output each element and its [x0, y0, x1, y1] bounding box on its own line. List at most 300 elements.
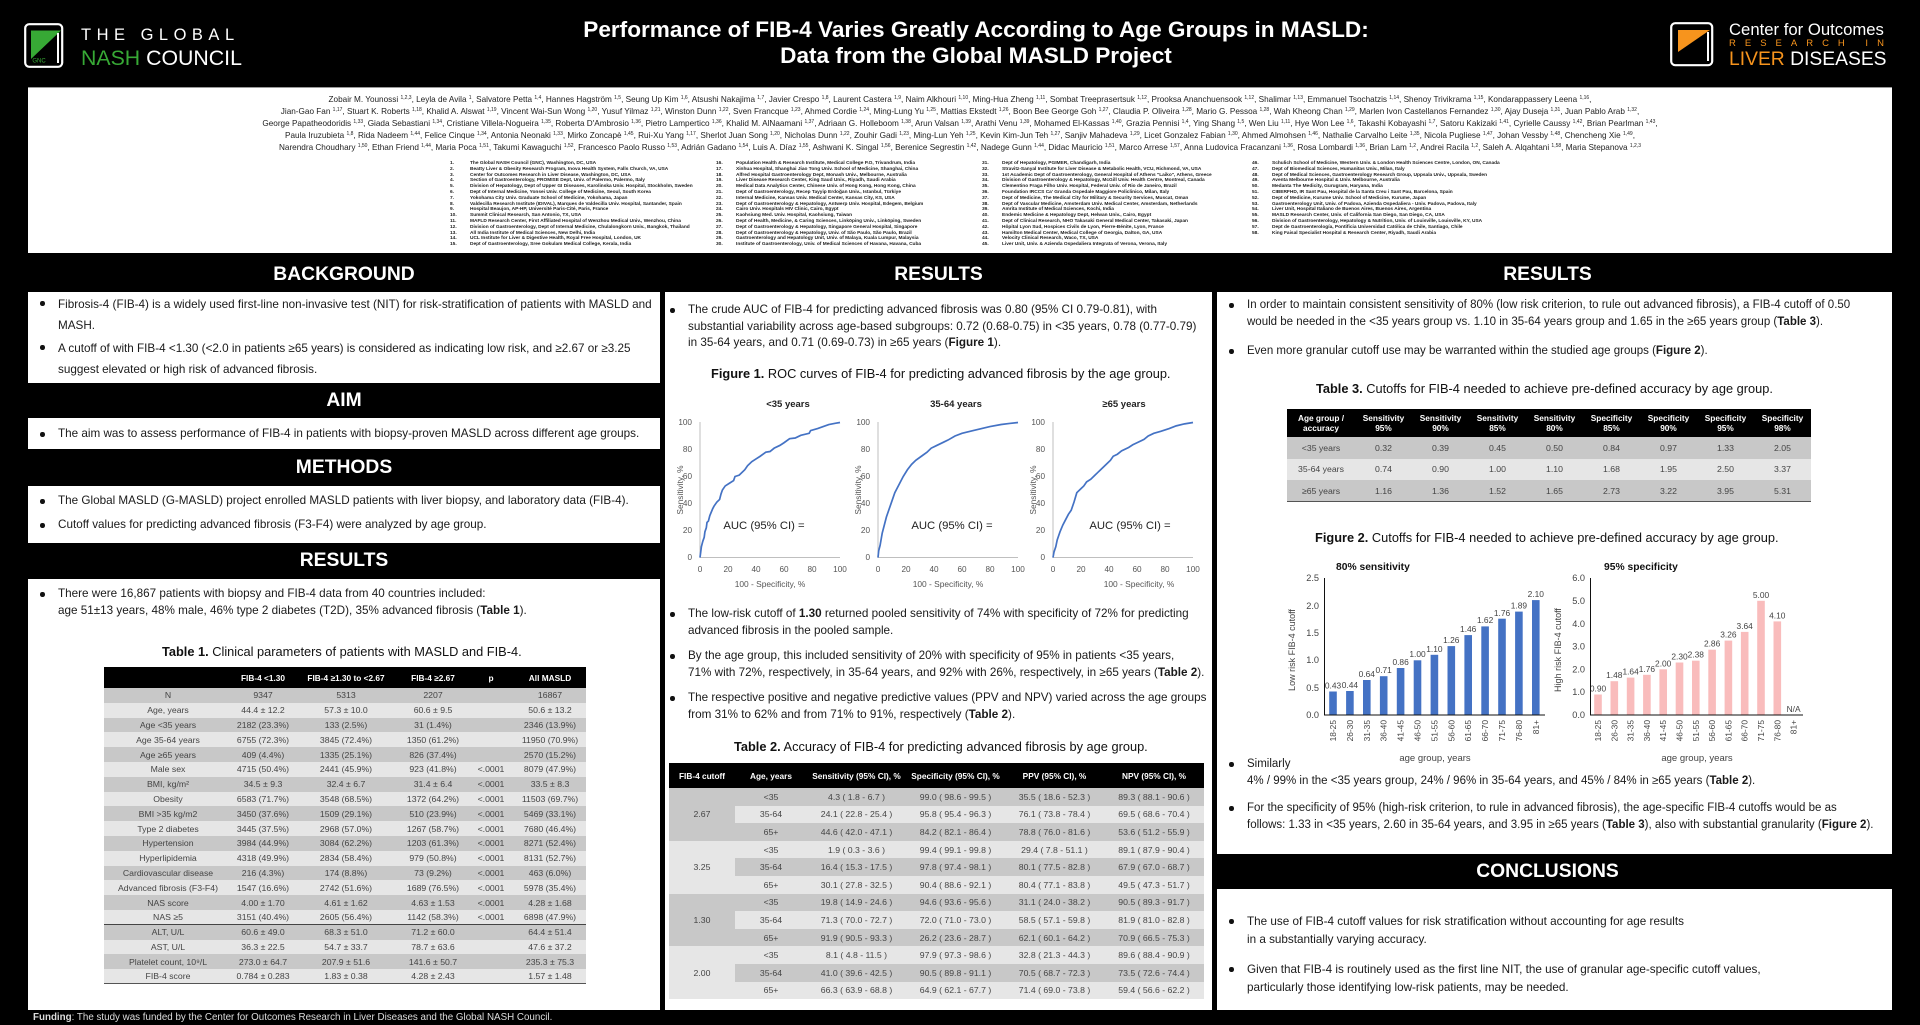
table 2: 67.9 ( 67.0 - 68.7 )	[1118, 862, 1190, 872]
table 2: 73.5 ( 72.6 - 74.4 )	[1118, 968, 1190, 978]
table 1: 5469 (33.1%)	[524, 809, 576, 819]
table 1: Type 2 diabetes	[137, 824, 199, 834]
table 1: 8271 (52.4%)	[524, 838, 576, 848]
chart: 95% specificity high risk cutoff: 41-45	[1658, 720, 1668, 741]
chart: 80% sensitivity low risk cutoff: 1.10	[1426, 644, 1443, 654]
panel: authors and affiliations: 28.	[716, 231, 723, 236]
heading: conclusions: CONCLUSIONS	[1476, 861, 1619, 882]
table 1: 3450 (37.6%)	[237, 809, 289, 819]
table 1: 32.4 ± 6.7	[327, 779, 365, 789]
table 2: 35-64	[760, 915, 782, 925]
panel: authors and affiliations: 32.	[982, 167, 989, 172]
affiliations column 1: Division of Hepatology, Dept of Upper GI Diseases, Karolinska Univ. Hospital, Stockholm, Sweden	[470, 184, 693, 189]
table 1: Obesity	[153, 794, 183, 804]
table 1: 68.3 ± 51.0	[324, 927, 368, 937]
chart: ROC 35-64 years: 20	[861, 526, 870, 535]
affiliations column 2: Kaohsiung Med. Univ. Hospital, Kaohsiung, Taiwan	[736, 213, 852, 218]
table 1: <.0001	[478, 853, 504, 863]
header band	[0, 0, 1920, 87]
chart: 95% specificity high risk cutoff: 2.0	[1572, 664, 1585, 674]
table 1: FIB-4 score	[146, 971, 190, 981]
panel: authors and affiliations: 13.	[450, 231, 457, 236]
table 1: <.0001	[478, 868, 504, 878]
panel: authors and affiliations: 56.	[1252, 219, 1259, 224]
table 2: 30.1 ( 27.8 - 32.5 )	[821, 880, 892, 890]
logo text: Liver Diseases: LIVER DISEASES	[1729, 49, 1887, 70]
affiliations column 3: Division of Gastroenterology & Hepatology, McGill Univ. Health Centre, Montreal, Canada	[1002, 178, 1205, 183]
panel: authors and affiliations: 29.	[716, 236, 723, 241]
affiliations column 1: MAFLD Research Center, First Affiliated Hospital of Wenzhou Medical Univ., Wenzhou, China	[470, 219, 681, 224]
table 2: <35	[764, 792, 778, 802]
table 3: 85%	[1603, 423, 1620, 433]
bullet: cutoffs: suggest elevated or high risk of advanced fibrosis.	[58, 362, 317, 376]
bullet: specificity of 95%: For the specificity of 95% (high-risk criterion, to rule in advanced fibrosis), the age-specific FIB-4 cutoffs would be as	[1247, 802, 1837, 814]
panel: authors and affiliations: 17.	[716, 167, 723, 172]
affiliations column 1: UCL Institute for Liver & Digestive Health, Royal Free Hospital, London, UK	[470, 236, 641, 241]
icon: GNC mark: GNC	[32, 58, 46, 64]
chart: 80% sensitivity low risk cutoff: age group, years	[1399, 753, 1471, 764]
panel: authors and affiliations: 2.	[450, 167, 454, 172]
bullet: by age group: By the age group, this included sensitivity of 20% with specificity of 95% in patients <35 years,	[688, 649, 1174, 662]
table 2: 97.8 ( 97.4 - 98.1 )	[920, 862, 991, 872]
table 2: 91.9 ( 90.5 - 93.3 )	[821, 933, 892, 943]
table 1: 71.2 ± 60.0	[411, 927, 455, 937]
table 1: Cardiovascular disease	[123, 868, 213, 878]
table 1: Age ≥65 years	[140, 750, 196, 760]
affiliations column 4: Liver Unit, Hospital Italiano de Buenos Aires, Buenos Aires, Argentina	[1272, 207, 1431, 212]
table 2: 76.1 ( 73.8 - 78.4 )	[1019, 809, 1090, 819]
affiliations column 4: Division of Gastroenterology, Hepatology & Nutrition, Univ. of Louisville, Louisville, KY, USA	[1272, 219, 1482, 224]
table 2: 24.1 ( 22.8 - 25.4 )	[821, 809, 892, 819]
affiliations column 3: Hôpital Lyon Sud, Hospices Civils de Lyon, Pierre-Bénite, Lyon, France	[1002, 225, 1164, 230]
table 2: 31.1 ( 24.0 - 38.2 )	[1019, 897, 1090, 907]
table 2: 69.5 ( 68.6 - 70.4 )	[1118, 809, 1190, 819]
chart: 80% sensitivity low risk cutoff: 51-55	[1429, 720, 1439, 741]
affiliations column 2: Xinhua Hospital, Shanghai Jiao Tong Univ. School of Medicine, Shanghai, China	[736, 167, 918, 172]
chart: ROC under 35 years: 80	[683, 445, 692, 454]
bullet: cutoffs: A cutoff of with FIB-4 <1.30 (<2.0 in patients ≥65 years) is considered as indicating low risk, and ≥2.67 or ≥3.25	[58, 342, 631, 355]
author list	[262, 95, 1658, 152]
table 1: NAS ≥5	[153, 912, 183, 922]
table 3: 0.84	[1603, 443, 1620, 453]
table 1: 3845 (72.4%)	[320, 735, 372, 745]
chart: ROC under 35 years: AUC (95% CI) =	[723, 520, 805, 532]
chart: 80% sensitivity low risk cutoff: 0.86	[1392, 657, 1409, 667]
table 3	[1287, 409, 1811, 502]
table 1: <.0001	[478, 883, 504, 893]
table 1: 216 (4.3%)	[242, 868, 284, 878]
panel: authors and affiliations: 19.	[716, 178, 723, 183]
affiliations column 2: Institute of Gastroenterology, Univ. of Medical Sciences of Havana, Havana, Cuba	[736, 242, 921, 247]
bullet: cohort: age 51±13 years, 48% male, 46% type 2 diabetes (T2D), 35% advanced fibrosis (Table 1).	[58, 604, 527, 617]
table 2: 19.8 ( 14.9 - 24.6 )	[821, 897, 892, 907]
table 1: 3084 (62.2%)	[320, 838, 372, 848]
chart: ROC 35-64 years: 40	[861, 499, 870, 508]
table 2: 3.25	[694, 862, 710, 872]
table 2: 41.0 ( 39.6 - 42.5 )	[821, 968, 892, 978]
table 1: 409 (4.4%)	[242, 750, 284, 760]
panel: authors and affiliations: 53.	[1252, 202, 1259, 207]
author list: Narendra Choudhary 1,50, Ethan Friend 1,44, Maria Poca 1,51, Takumi Kawaguchi 1,52, Francesco Paolo Russo 1,53, Adrián Gadano 1,54, Luis A. Díaz 1,55, Ashwani K. Singal 1,56, Berenice Segrestin 1,42, Nadege Gunn 1,44, Didac Mauricio 1,51, Marco Arrese 1,57, Anna Ludovica Fracanzani 1,36, Rosa Lombardi 1,36, Brian Lam 1,2, Andrei Racila 1,2, Saleh A. Alqahtani 1,58, Maria Stepanova 1,2,3	[279, 143, 1641, 152]
panel: authors and affiliations: 38.	[982, 202, 989, 207]
table 3: 90%	[1432, 423, 1449, 433]
chart: 80% sensitivity low risk cutoff: 41-45	[1396, 720, 1406, 741]
table 1: 16867	[538, 690, 562, 700]
table 2: 35-64	[760, 862, 782, 872]
panel: authors and affiliations: 25.	[716, 213, 723, 218]
table 1: 6583 (71.7%)	[237, 794, 289, 804]
table 1: 3151 (40.4%)	[237, 912, 289, 922]
heading: background: BACKGROUND	[273, 264, 415, 285]
table 1: <.0001	[478, 824, 504, 834]
chart: 95% specificity high risk cutoff: 5.0	[1572, 596, 1585, 606]
affiliations column 1: Hospital Beaujon, AP-HP, Université Paris-Cité, Paris, France	[470, 207, 608, 212]
panel: authors and affiliations: 11.	[450, 219, 456, 224]
chart: ROC 65 years and over: 60	[1132, 565, 1142, 574]
panel: authors and affiliations: 24.	[716, 207, 723, 212]
chart: 80% sensitivity low risk cutoff: 0.44	[1342, 680, 1358, 690]
table 1: 141.6 ± 50.7	[409, 957, 457, 967]
table 1: 1689 (76.5%)	[407, 883, 459, 893]
affiliations column 1: Division of Gastroenterology, Dept of Internal Medicine, Chulalongkorn Univ., Bangkok, Thailand	[470, 225, 690, 230]
chart: ROC under 35 years: 20	[723, 565, 733, 574]
table 2: 64.9 ( 62.1 - 67.7 )	[920, 985, 991, 995]
affiliations column 3: Dept of Clinical Research, NHO Takasaki General Medical Center, Takasaki, Japan	[1002, 219, 1188, 224]
table 2: 4.3 ( 1.8 - 6.7 )	[828, 792, 885, 802]
chart: ROC under 35 years: <35 years	[766, 399, 810, 410]
table 1: 4.28 ± 2.43	[411, 971, 455, 981]
affiliations column 1: The Global NASH Council (GNC), Washington, DC, USA	[470, 161, 596, 166]
chart: 95% specificity high risk cutoff: 0.0	[1572, 710, 1585, 720]
table 1: 4.61 ± 1.62	[324, 898, 368, 908]
table 1: 0.784 ± 0.283	[236, 971, 290, 981]
table 3: Specificity	[1762, 413, 1803, 423]
table 3: 95%	[1375, 423, 1392, 433]
table 1: 463 (6.0%)	[529, 868, 571, 878]
panel: results column 1	[28, 543, 660, 1010]
table 1: <.0001	[478, 898, 504, 908]
bullet: consistent sensitivity: In order to maintain consistent sensitivity of 80% (low risk criterion, to rule out advanced fibrosis), a FIB-4 cutoff of 0.50	[1247, 299, 1850, 311]
chart: 95% specificity high risk cutoff: 95% specificity	[1604, 562, 1678, 573]
chart: 95% specificity high risk cutoff: 18-25	[1593, 720, 1603, 741]
panel: authors and affiliations: 12.	[450, 225, 457, 230]
panel: authors and affiliations: 37.	[982, 196, 989, 201]
chart: 80% sensitivity low risk cutoff: 36-40	[1379, 720, 1389, 741]
table 1: 1350 (61.2%)	[407, 735, 459, 745]
affiliations column 4: Dept of Medical Sciences, Gastroenterology Research Group, Uppsala Univ., Uppsala, Sweden	[1272, 173, 1487, 178]
chart: ROC under 35 years: 60	[779, 565, 789, 574]
chart: 80% sensitivity low risk cutoff: 1.5	[1306, 628, 1319, 638]
chart: ROC under 35 years: 60	[683, 472, 692, 481]
panel: authors and affiliations: 8.	[450, 202, 454, 207]
table 2: 16.4 ( 15.3 - 17.5 )	[821, 862, 892, 872]
chart: 95% specificity high risk cutoff: 71-75	[1756, 720, 1766, 741]
panel: authors and affiliations: 1.	[450, 161, 454, 166]
heading: methods: METHODS	[296, 457, 392, 478]
table 3: accuracy	[1303, 423, 1339, 433]
chart: ROC 65 years and over: 80	[1160, 565, 1170, 574]
chart: ROC 65 years and over: 0	[1051, 565, 1056, 574]
table 1: 8079 (47.9%)	[524, 764, 576, 774]
affiliations column 1	[450, 160, 693, 247]
bullet: crude AUC: The crude AUC of FIB-4 for predicting advanced fibrosis was 0.80 (95% CI 0.79-0.81), with	[688, 303, 1157, 316]
affiliations column 3: Dept of Hepatology, PGIMER, Chandigarh, India	[1002, 161, 1110, 166]
table 3: 1.36	[1432, 486, 1449, 496]
panel: authors and affiliations: 18.	[716, 173, 723, 178]
affiliations column 4: Schulich School of Medicine, Western Univ. & London Health Sciences Centre, London, ON, Canada	[1272, 161, 1500, 166]
bullet: similarly	[1247, 756, 1755, 789]
table 2: 65+	[764, 880, 778, 890]
panel: authors and affiliations: 30.	[716, 242, 723, 247]
chart: 95% specificity high risk cutoff: 4.0	[1572, 619, 1585, 629]
chart: 95% specificity high risk cutoff: 3.0	[1572, 642, 1585, 652]
table 1: 57.3 ± 10.0	[324, 705, 368, 715]
chart: 80% sensitivity low risk cutoff: 0.71	[1376, 665, 1392, 675]
logo text: Research in: RESEARCH IN	[1729, 38, 1893, 49]
panel: authors and affiliations: 52.	[1252, 196, 1259, 201]
chart: ROC 35-64 years: 35-64 years	[930, 399, 982, 410]
table 3: 3.95	[1717, 486, 1734, 496]
panel: authors and affiliations: 6.	[450, 190, 454, 195]
panel: authors and affiliations: 5.	[450, 184, 454, 189]
affiliations column 2: Population Health & Research Institute, Medical College P.O, Trivandrum, India	[736, 161, 915, 166]
table 2: 71.3 ( 70.0 - 72.7 )	[821, 915, 892, 925]
table 2: 81.9 ( 81.0 - 82.8 )	[1118, 915, 1190, 925]
panel: authors and affiliations: 20.	[716, 184, 723, 189]
affiliations column 3: Liver Unit, Univ. & Azienda Ospedaliera Integrata of Verona, Verona, Italy	[1002, 242, 1167, 247]
chart: 95% specificity high risk cutoff: 2.30	[1671, 652, 1688, 662]
table 1: <.0001	[478, 764, 504, 774]
affiliations column 3: Endemic Medicine & Hepatology Dept, Helwan Univ., Cairo, Egypt	[1002, 213, 1151, 218]
logo text: Center for Outcomes: Center for Outcomes	[1729, 20, 1884, 39]
table 3: 80%	[1546, 423, 1563, 433]
chart: ROC 65 years and over: 100	[1186, 565, 1200, 574]
chart: 80% sensitivity low risk cutoff: 2.10	[1528, 589, 1544, 599]
table 1: Age 35-64 years	[136, 735, 200, 745]
chart: 80% sensitivity low risk cutoff: 46-50	[1412, 720, 1422, 741]
table 1	[104, 667, 586, 984]
author list: Zobair M. Younossi 1,2,3, Leyla de Avila 1, Salvatore Petta 1,4, Hannes Hagström 1,5, Seung Up Kim 1,6, Atsushi Nakajima 1,7, Javier Crespo 1,8, Laurent Castera 1,9, Naim Alkhouri 1,10, Ming-Hua Zheng 1,11, Sombat Treeprasertsuk 1,12, Prooksa Ananchuensook 1,12, Shalimar 1,13, Emmanuel Tsochatzis 1,14, Shenoy Trivikrama 1,15, Kondarappassery Leena 1,16,	[329, 95, 1591, 104]
heading: conclusions	[1217, 854, 1892, 889]
table 1: 4318 (49.9%)	[237, 853, 289, 863]
table 3: 0.74	[1375, 464, 1392, 474]
table 1 caption: Table 1. Clinical parameters of patients with MASLD and FIB-4.	[162, 644, 522, 659]
heading: results: RESULTS	[1503, 264, 1592, 285]
table 2: 26.2 ( 23.6 - 28.7 )	[920, 933, 991, 943]
table 2: <35	[764, 897, 778, 907]
panel: aim	[28, 383, 660, 449]
affiliations column 4: Aventa Melbourne Hospital & Univ. Melbourne, Australia	[1272, 178, 1400, 183]
panel: authors and affiliations: 27.	[716, 225, 723, 230]
chart: 95% specificity high risk cutoff: High risk FIB-4 cutoff	[1553, 608, 1563, 692]
table 1: 44.4 ± 12.2	[241, 705, 285, 715]
table 1: 1.83 ± 0.38	[324, 971, 368, 981]
table 1: 54.7 ± 33.7	[324, 942, 368, 952]
chart: ROC 35-64 years: 0	[876, 565, 881, 574]
chart: 80% sensitivity low risk cutoff: 1.46	[1460, 624, 1477, 634]
affiliations column 3: Velocity Clinical Research, Waco, TX, USA	[1002, 236, 1098, 241]
chart: ROC 35-64 years: 0	[865, 553, 870, 562]
affiliations column 1: Dept of Internal Medicine, Yonsei Univ. College of Medicine, Seoul, South Korea	[470, 190, 651, 195]
table 3: 1.33	[1717, 443, 1734, 453]
table 1: 1547 (16.6%)	[237, 883, 289, 893]
table 1: 7680 (46.4%)	[524, 824, 576, 834]
table 2: 2.67	[694, 809, 710, 819]
bullet: crude AUC: substantial variability across age-based subgroups: 0.72 (0.68-0.75) in <35 years, 0.78 (0.77-0.79)	[688, 320, 1196, 333]
chart: 95% specificity high risk cutoff: age group, years	[1661, 753, 1733, 764]
chart: 95% specificity high risk cutoff: 2.00	[1655, 658, 1672, 668]
author list: Jian-Gao Fan 1,17, Stuart K. Roberts 1,18, Khalid A. Alswat 1,19, Vincent Wai-Sun Wong 1,20, Yusuf Yilmaz 1,21, Winston Dunn 1,22, Sven Francque 1,23, Ahmed Cordie 1,24, Ming-Lung Yu 1,25, Mattias Ekstedt 1,26, Boon Bee George Goh 1,27, Claudia P. Oliveira 1,28, Mario G. Pessoa 1,28, Wah Kheong Chan 1,29, Marlen Ivon Castellanos Fernandez 1,30, Ajay Duseja 1,31, Juan Pablo Arab 1,32,	[281, 107, 1639, 116]
chart: 80% sensitivity low risk cutoff: 81+	[1531, 720, 1541, 734]
table 2: 66.3 ( 63.9 - 68.8 )	[821, 985, 892, 995]
panel: authors and affiliations: 58.	[1252, 231, 1259, 236]
chart: 80% sensitivity low risk cutoff: 26-30	[1345, 720, 1355, 741]
affiliations column 1: Center for Outcomes Research in Liver Disease, Washington, DC, USA	[470, 173, 631, 178]
chart: ROC 65 years and over: 100	[1031, 418, 1045, 427]
panel: results column 3	[1217, 257, 1892, 854]
table 2: 1.9 ( 0.3 - 3.6 )	[828, 845, 885, 855]
table 3: 1.68	[1603, 464, 1620, 474]
table 1: 174 (8.8%)	[325, 868, 367, 878]
table 2: Age, years	[750, 770, 792, 780]
table 3: 2.50	[1717, 464, 1734, 474]
chart: 80% sensitivity low risk cutoff: 66-70	[1480, 720, 1490, 741]
table 1: 1372 (64.2%)	[407, 794, 459, 804]
chart: ROC 35-64 years: 20	[901, 565, 911, 574]
table 1: Hypertension	[142, 838, 194, 848]
table 1: 1142 (58.3%)	[407, 912, 459, 922]
heading: aim	[28, 383, 660, 418]
heading: methods	[28, 449, 660, 486]
affiliations column 2: Cairo Univ. Hospitals HIV Clinic, Cairo, Egypt	[736, 207, 839, 212]
affiliations column 2: Liver Disease Research Center, King Saud Univ., Riyadh, Saudi Arabia	[736, 178, 896, 183]
chart: ROC 35-64 years: 80	[985, 565, 995, 574]
heading: results	[1217, 257, 1892, 292]
affiliations column 3: Hamilton Medical Center, Medical College of Georgia, Dalton, GA, USA	[1002, 231, 1162, 236]
table 3: 85%	[1489, 423, 1506, 433]
heading: background	[28, 257, 660, 292]
table 3: 2.05	[1774, 443, 1791, 453]
table 1: 1.57 ± 1.48	[528, 971, 572, 981]
chart: ROC 35-64 years: 60	[957, 565, 967, 574]
affiliations column 4: King Faisal Specialist Hospital & Research Center, Riyadh, Saudi Arabia	[1272, 231, 1436, 236]
chart: 95% specificity high risk cutoff: 61-65	[1723, 720, 1733, 741]
panel: authors and affiliations: 22.	[716, 196, 723, 201]
chart: 80% sensitivity low risk cutoff: 71-75	[1497, 720, 1507, 741]
bullet: by age group	[688, 648, 1204, 681]
table 2: 35-64	[760, 809, 782, 819]
affiliations column 3: Amrita Institute of Medical Sciences, Kochi, India	[1002, 207, 1114, 212]
affiliations column 2: Dept of Gastroenterology & Hepatology, Antwerp Univ. Hospital, Edegem, Belgium	[736, 202, 923, 207]
chart: ROC 65 years and over: 20	[1036, 526, 1045, 535]
heading: results	[665, 257, 1212, 292]
bullet: specificity of 95%	[1247, 800, 1873, 833]
table 1: 11503 (69.7%)	[522, 794, 578, 804]
table 2: Specificity (95% CI), %	[911, 770, 1000, 780]
table 2: 90.4 ( 88.6 - 92.1 )	[920, 880, 991, 890]
table 1: NAS score	[147, 898, 189, 908]
panel: authors and affiliations: 10.	[450, 213, 457, 218]
chart: ROC 65 years and over	[1028, 399, 1200, 589]
table 3: 0.45	[1489, 443, 1506, 453]
chart: 95% specificity high risk cutoff: 3.64	[1737, 621, 1753, 631]
table 2: 2.00	[694, 968, 710, 978]
affiliations column 4: CIBERFHD, IR Sant Pau, Hospital de la Santa Creu i Sant Pau, Barcelona, Spain	[1272, 190, 1453, 195]
table 1: 4.28 ± 1.68	[528, 898, 572, 908]
table 1: 60.6 ± 9.5	[414, 705, 452, 715]
chart: 95% specificity high risk cutoff: 46-50	[1674, 720, 1684, 741]
table 2: 97.9 ( 97.3 - 98.6 )	[920, 950, 991, 960]
panel: authors and affiliations: 4.	[450, 178, 454, 183]
table 1: 826 (37.4%)	[409, 750, 457, 760]
chart: 80% sensitivity low risk cutoff: 0.0	[1306, 710, 1319, 720]
chart: ROC 35-64 years: 40	[929, 565, 939, 574]
icon: GNC mark	[24, 23, 64, 68]
table 2: 80.4 ( 77.1 - 83.8 )	[1019, 880, 1090, 890]
panel: authors and affiliations: 47.	[1252, 167, 1259, 172]
bullet: FIB-4 definition	[58, 295, 652, 336]
table 3: 0.50	[1546, 443, 1563, 453]
chart: ROC under 35 years: 0	[698, 565, 703, 574]
table 1: 11950 (70.9%)	[522, 735, 578, 745]
table 2: 90.5 ( 89.3 - 91.7 )	[1118, 897, 1190, 907]
table 2 caption: Table 2. Accuracy of FIB-4 for predicting advanced fibrosis by age group.	[734, 739, 1148, 754]
chart: 95% specificity high risk cutoff: 2.86	[1704, 639, 1721, 649]
table 1: 2968 (57.0%)	[320, 824, 372, 834]
panel: authors and affiliations: 35.	[982, 184, 989, 189]
bullet: predictive values: The respective positive and negative predictive values (PPV and NPV) varied across the age groups	[688, 691, 1206, 704]
panel: authors and affiliations: 51.	[1252, 190, 1259, 195]
table 1: BMI >35 kg/m2	[139, 809, 197, 819]
table 2: 35-64	[760, 968, 782, 978]
table 2: 35.5 ( 18.6 - 52.3 )	[1019, 792, 1090, 802]
chart: 80% sensitivity low risk cutoff: 2.0	[1306, 601, 1319, 611]
affiliations column 2: Medical Data Analytics Center, Chinese Univ. of Hong Kong, Hong Kong, China	[736, 184, 916, 189]
chart: ROC under 35 years: 20	[683, 526, 692, 535]
chart: ROC under 35 years: Sensitivity, %	[675, 465, 685, 515]
affiliations column 4: MASLD Research Center, Univ. of California San Diego, San Diego, CA, USA	[1272, 213, 1445, 218]
table 1: 273.0 ± 64.7	[239, 957, 287, 967]
table 3: 0.32	[1375, 443, 1392, 453]
chart: 80% sensitivity low risk cutoff: 1.26	[1443, 635, 1460, 645]
table 1: 47.6 ± 37.2	[528, 942, 572, 952]
title	[583, 17, 1369, 68]
table 2: <35	[764, 950, 778, 960]
panel: methods	[28, 449, 660, 543]
title: Performance of FIB-4 Varies Greatly According to Age Groups in MASLD:	[583, 17, 1369, 42]
table 1: ALT, U/L	[152, 927, 184, 937]
table 2: <35	[764, 845, 778, 855]
bullet: FIB-4 definition: Fibrosis-4 (FIB-4) is a widely used first-line non-invasive test (NIT) for risk-stratification of patients with MASLD and	[58, 298, 652, 311]
chart: 95% specificity high risk cutoff: 26-30	[1609, 720, 1619, 741]
bullet: similarly: Similarly	[1247, 758, 1290, 770]
table 2: 80.1 ( 77.5 - 82.8 )	[1019, 862, 1090, 872]
affiliations column 3	[982, 160, 1212, 247]
table 1: 979 (50.8%)	[409, 853, 457, 863]
table 2: 44.6 ( 42.0 - 47.1 )	[821, 827, 892, 837]
table 1: 133 (2.5%)	[325, 720, 367, 730]
table 3: 3.22	[1660, 486, 1677, 496]
panel: authors and affiliations: 48.	[1252, 173, 1259, 178]
table 2: PPV (95% CI), %	[1023, 770, 1086, 780]
bullet: accuracy	[1247, 913, 1684, 949]
heading: results: RESULTS	[300, 550, 388, 571]
chart: 80% sensitivity low risk cutoff: 0.64	[1359, 669, 1375, 679]
chart: 95% specificity high risk cutoff: N/A	[1787, 704, 1801, 714]
table 2: 90.5 ( 89.8 - 91.1 )	[920, 968, 991, 978]
chart: ROC 65 years and over: 20	[1076, 565, 1086, 574]
table 1: 50.6 ± 13.2	[528, 705, 572, 715]
